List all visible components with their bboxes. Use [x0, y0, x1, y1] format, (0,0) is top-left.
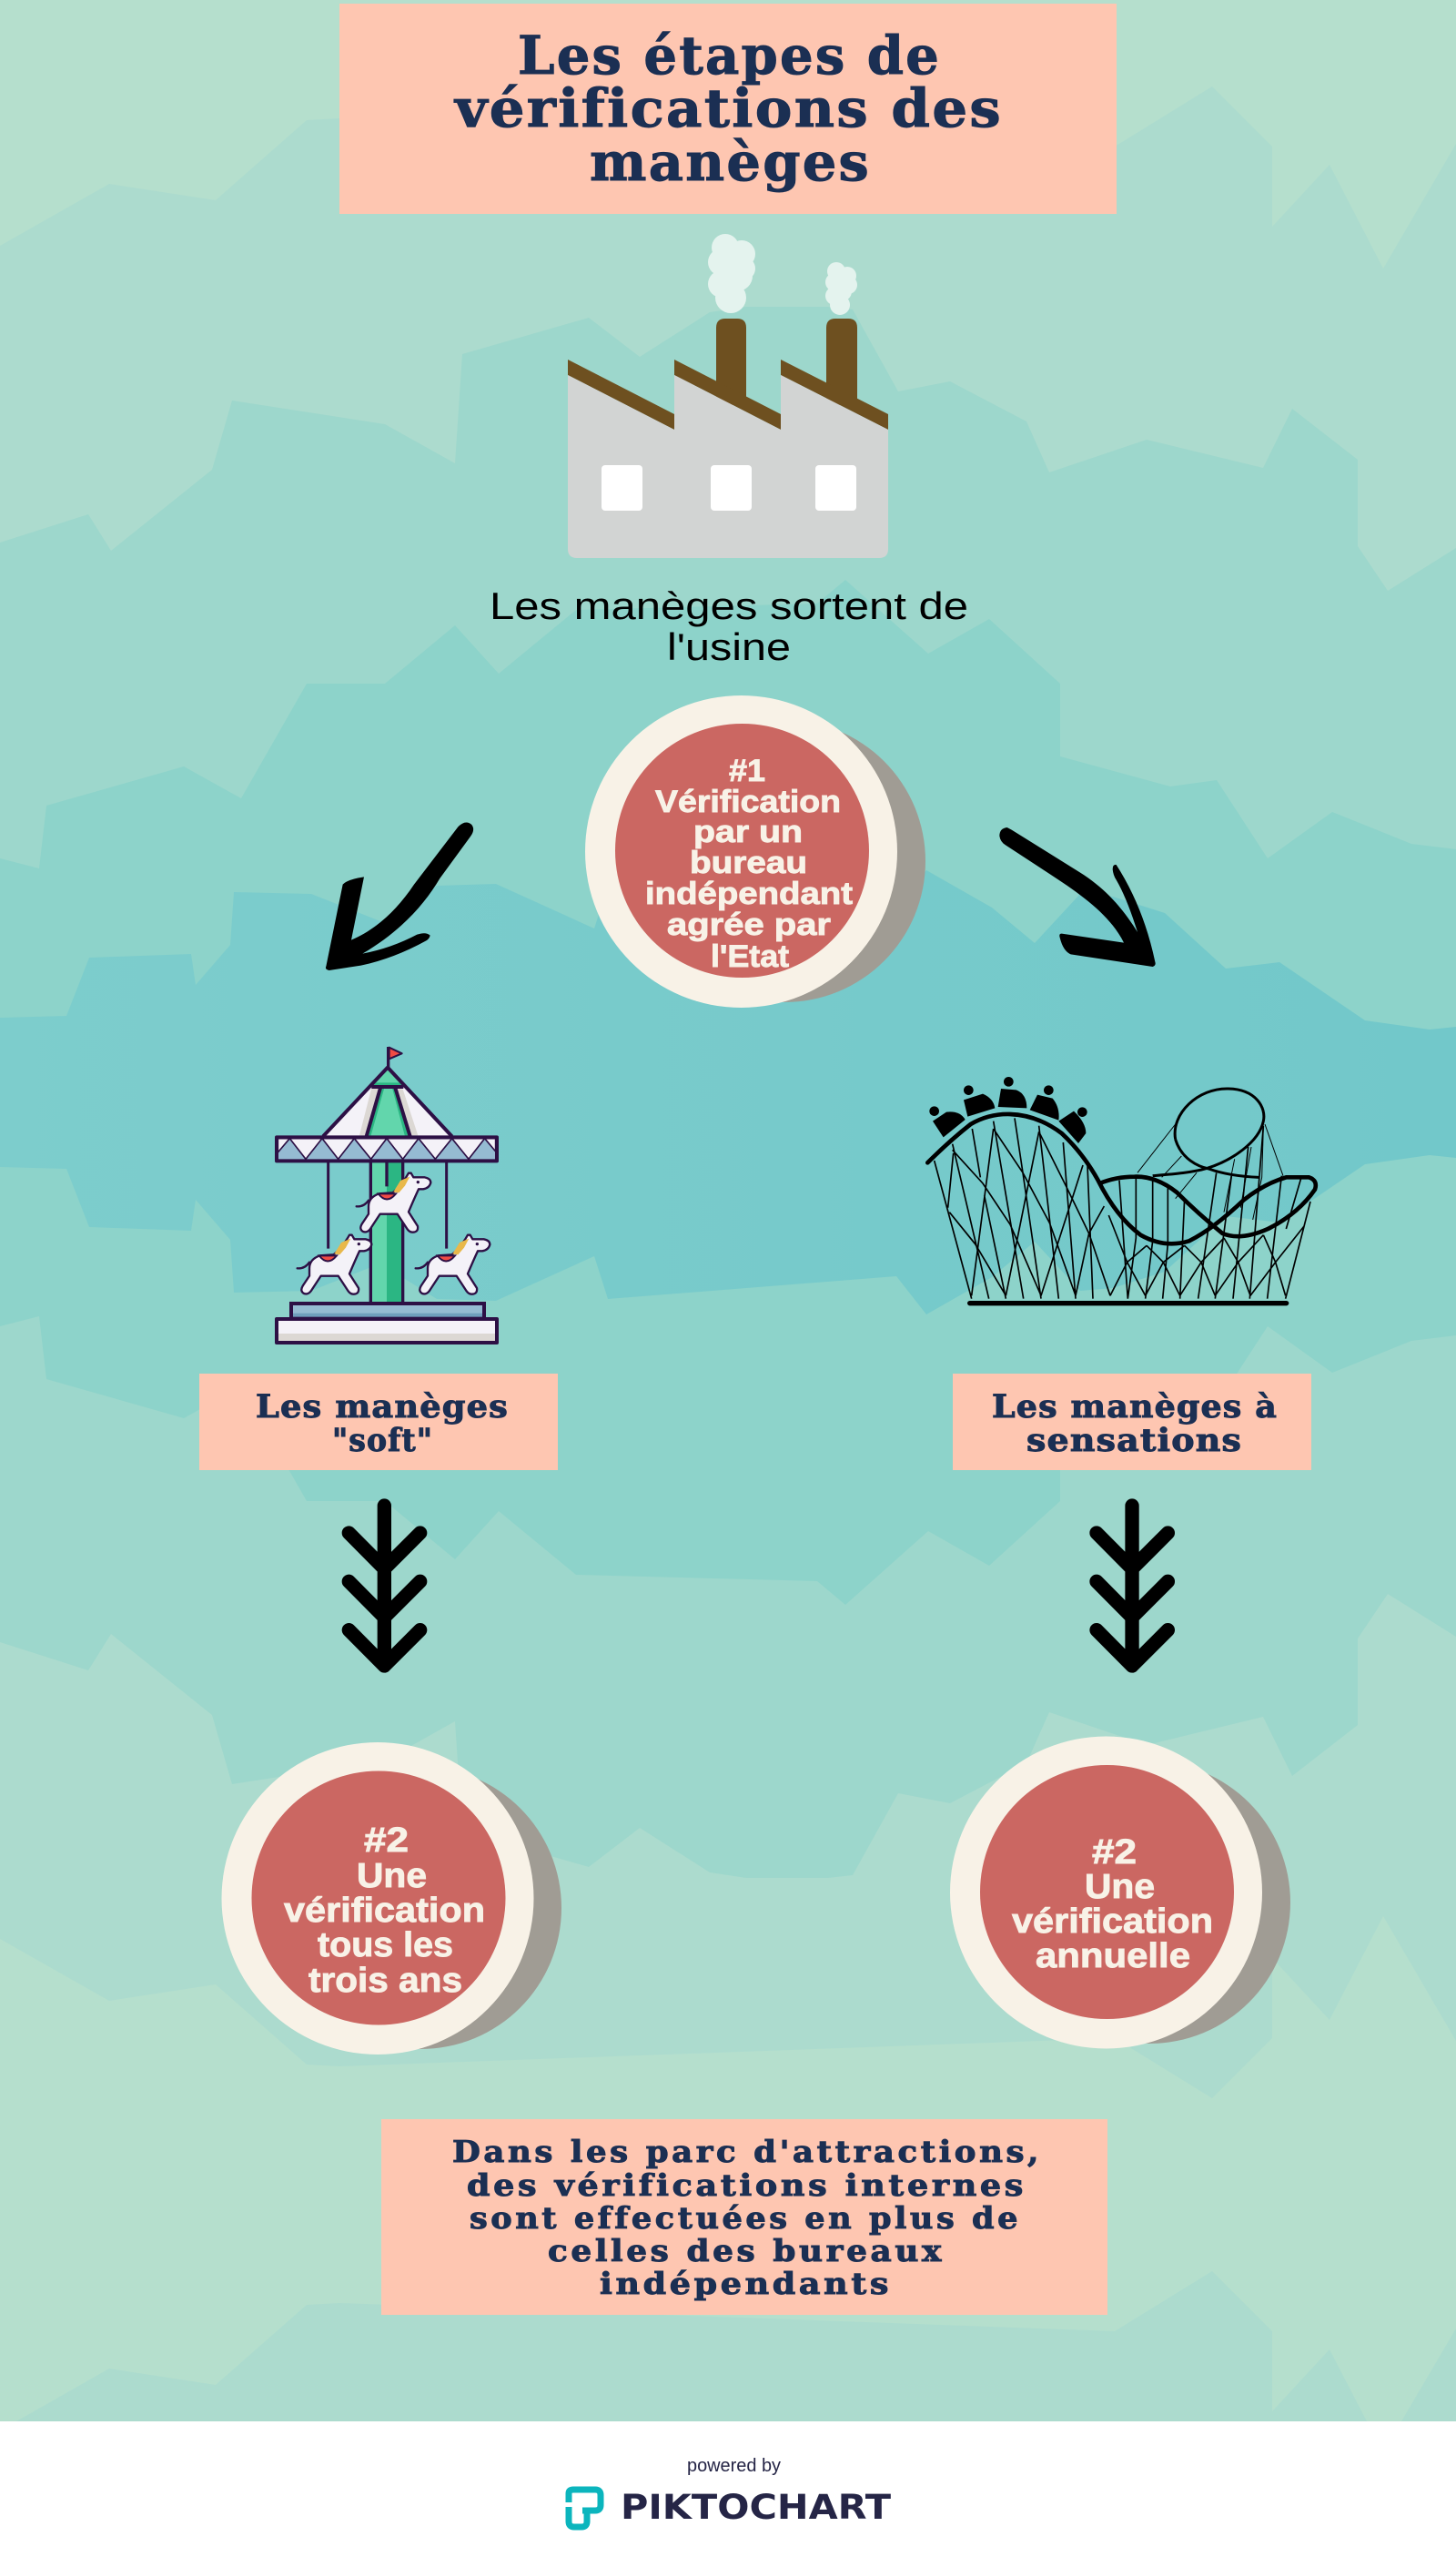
arrow: down-left: [326, 822, 473, 970]
circle: check #2 annual: vérification: [1012, 1902, 1213, 1941]
carousel roof: [323, 1068, 452, 1136]
title panel: vérifications des: [454, 77, 1003, 139]
coaster loop supports: [1138, 1124, 1283, 1220]
label: soft rides: "soft": [332, 1422, 433, 1459]
callout: internal checks: indépendants: [600, 2266, 892, 2301]
title panel: manèges: [590, 131, 871, 193]
footer: logo mark: [569, 2490, 601, 2527]
circle: check #2 every three years: trois ans: [308, 1962, 462, 2000]
circle: check #1: indépendant: [645, 877, 853, 911]
callout: internal checks: des vérifications internes: [467, 2167, 1026, 2203]
carousel column: [329, 1161, 447, 1304]
circle: check #2 annual: annuelle: [1036, 1937, 1190, 1975]
callout: internal checks: [381, 2119, 1107, 2315]
label: thrill rides: Les manèges à: [992, 1388, 1278, 1426]
circle: check #2 annual: #2: [1092, 1833, 1137, 1872]
circle: check #2 annual: Une: [1085, 1868, 1155, 1906]
carousel horses: [298, 1173, 490, 1294]
circle: check #1: agrée par: [667, 908, 831, 942]
carousel base: [277, 1304, 497, 1343]
circle: check #2 every three years: tous les: [318, 1926, 453, 1964]
footer: [0, 2421, 1456, 2567]
coaster base: [970, 1296, 1287, 1311]
coaster track: [927, 1114, 1316, 1243]
circle: check #1: #1: [729, 754, 765, 788]
circle: check #2 every three years: vérification: [284, 1892, 485, 1930]
callout: internal checks: Dans les parc d'attractions,: [452, 2134, 1042, 2169]
text: factory caption: l'usine: [667, 625, 791, 668]
label: soft rides: Les manèges: [256, 1388, 509, 1426]
label: thrill rides: [953, 1374, 1311, 1470]
carousel flag: [389, 1047, 402, 1068]
coaster loop: [1153, 1089, 1264, 1177]
arrow: triple chevron right: [1097, 1506, 1168, 1666]
title panel: Les étapes de: [518, 25, 941, 86]
carousel band: [277, 1137, 497, 1161]
circle: check #2 annual: [950, 1737, 1290, 2048]
circle: check #2 every three years: [222, 1742, 561, 2055]
circle: check #1: l'Etat: [711, 939, 789, 974]
callout: internal checks: sont effectuées en plus de: [470, 2200, 1021, 2236]
coaster supports: [935, 1118, 1310, 1299]
title panel: [339, 4, 1117, 214]
footer: logo wordmark: PIKTOCHART: [621, 2488, 892, 2527]
circle: check #1: Vérification: [655, 785, 841, 819]
circle: check #1: [585, 695, 925, 1008]
footer: powered by: powered by: [687, 2456, 781, 2476]
circle: check #1: par un: [693, 815, 803, 849]
circle: check #1: bureau: [690, 846, 807, 880]
label: thrill rides: sensations: [1026, 1422, 1242, 1459]
icon: roller coaster: [927, 1077, 1316, 1304]
circle: check #2 every three years: #2: [364, 1821, 409, 1860]
text: factory caption: [490, 584, 968, 668]
icon: carousel: [277, 1047, 497, 1343]
circle: check #2 every three years: Une: [357, 1857, 427, 1895]
coaster cars: [929, 1077, 1087, 1143]
text: factory caption: Les manèges sortent de: [490, 584, 968, 627]
icon: factory: [568, 234, 888, 558]
callout: internal checks: celles des bureaux: [548, 2233, 945, 2268]
arrow: triple chevron left: [349, 1506, 420, 1666]
label: soft rides: [199, 1374, 558, 1470]
arrow: down-right: [999, 827, 1156, 967]
